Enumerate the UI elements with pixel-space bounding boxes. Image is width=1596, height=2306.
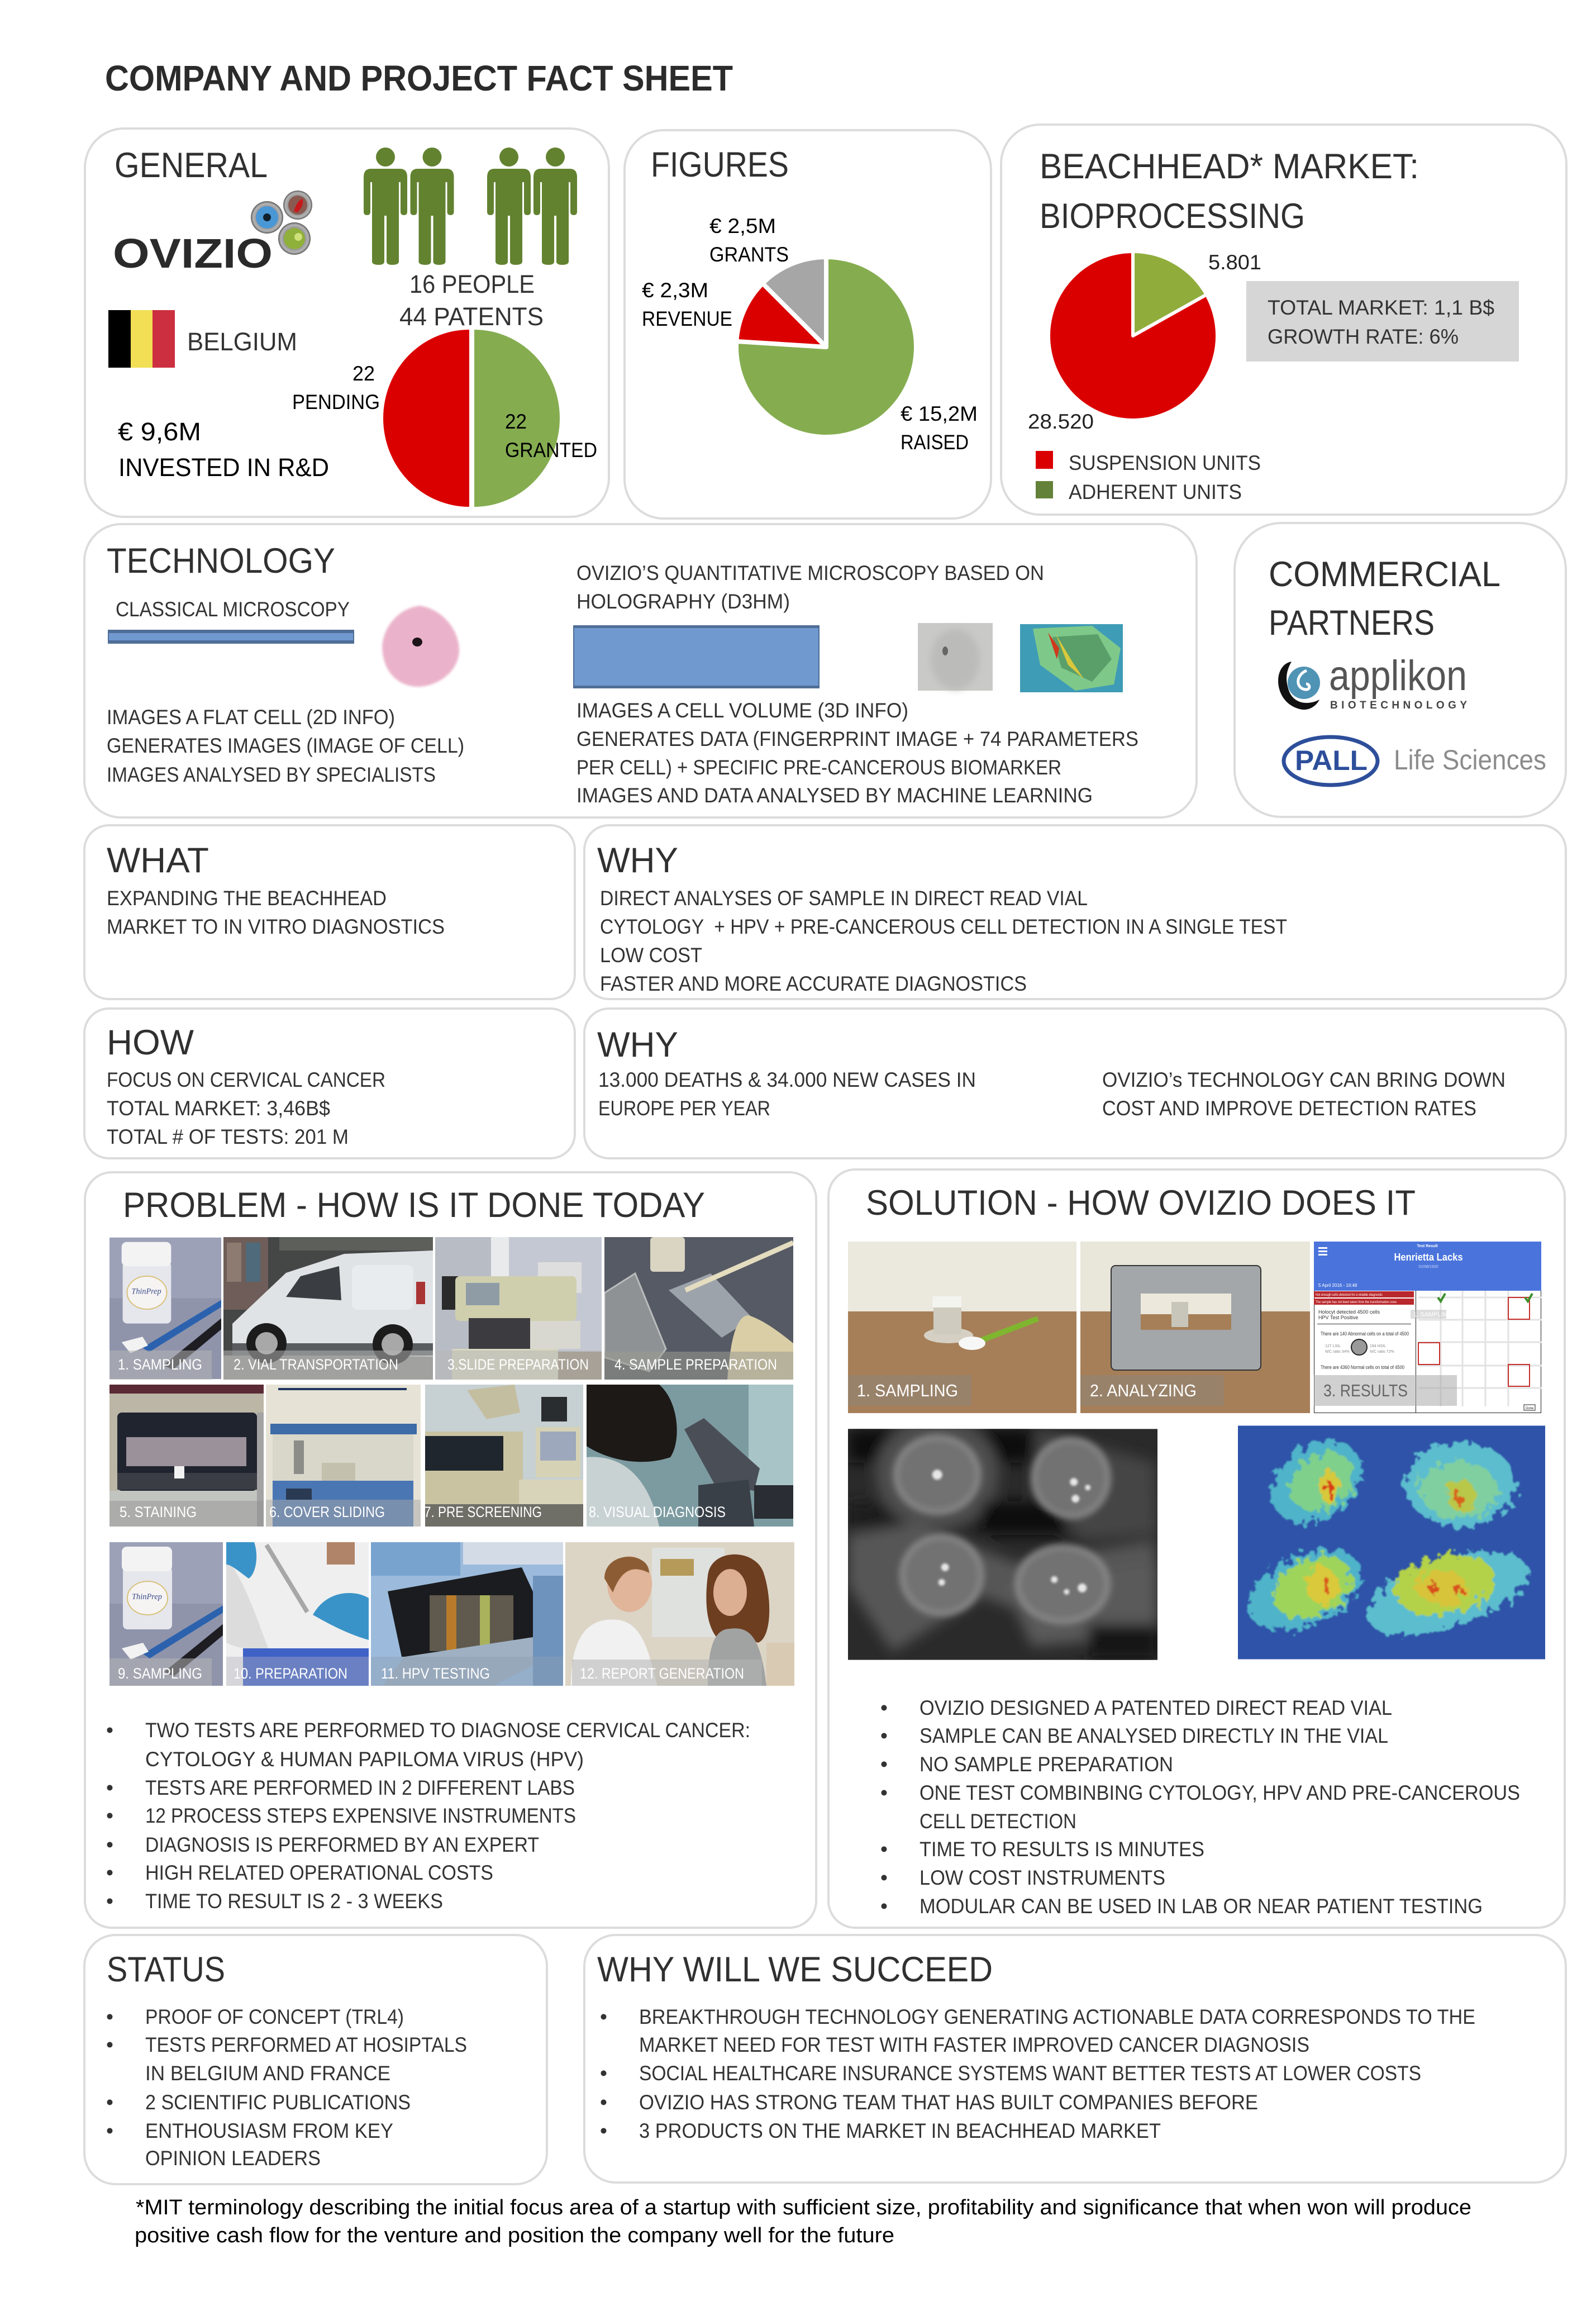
icon: people xyxy=(364,148,577,265)
legend xyxy=(1036,451,1261,503)
logo: applikon xyxy=(1278,652,1467,711)
panel frame: how xyxy=(84,1009,575,1158)
why benefits text: DIRECT ANALYSES OF SAMPLE IN DIRECT READ VIAL xyxy=(600,887,1088,910)
bullet list: success factors: • xyxy=(600,2119,607,2142)
incidence text xyxy=(598,1068,976,1120)
why benefits text: CYTOLOGY + HPV + PRE-CANCEROUS CELL DETECTION IN A SINGLE TEST xyxy=(600,915,1287,938)
photo: 11 hpv testing xyxy=(371,1542,563,1686)
panel frame: why will we succeed xyxy=(584,1935,1566,2183)
bullet list: problem: • xyxy=(106,1776,113,1799)
technology impact text: COST AND IMPROVE DETECTION RATES xyxy=(1102,1097,1476,1120)
bullet list: status: • xyxy=(106,2091,113,2114)
panel frame: status xyxy=(84,1935,547,2184)
panel: status xyxy=(84,1935,547,2184)
heading: commercial partners: COMMERCIAL xyxy=(1269,555,1500,594)
heading: why: WHY xyxy=(597,1025,678,1064)
photo: 1 sampling: 1. SAMPLING xyxy=(118,1356,202,1373)
classical microscopy text xyxy=(107,706,464,786)
photo: 3 results screen: N/C ratio 34% xyxy=(1325,1350,1350,1354)
bullet list: success factors: BREAKTHROUGH TECHNOLOGY GENERATING ACTIONABLE DATA CORRESPONDS TO THE xyxy=(639,2005,1475,2028)
photo: 3 results screen: HPV Test Positive xyxy=(1318,1315,1358,1320)
panel: general xyxy=(85,129,609,517)
label: granted patents: 22 xyxy=(505,410,527,433)
photo: 1 sampling xyxy=(848,1242,1076,1413)
photo: 3 results screen: Done xyxy=(1526,1407,1534,1410)
photo: 10 preparation: 10. PREPARATION xyxy=(234,1665,347,1682)
bullet list: problem: HIGH RELATED OPERATIONAL COSTS xyxy=(145,1861,493,1884)
classical microscopy text: GENERATES IMAGES (IMAGE OF CELL) xyxy=(107,734,464,757)
panel frame: what xyxy=(84,825,575,999)
photo: 12 report generation: 12. REPORT GENERATION xyxy=(580,1665,744,1682)
legend: SUSPENSION UNITS xyxy=(1069,451,1261,474)
footnote: *MIT terminology describing the initial focus area of a startup with sufficient size, profitability and significance that when won will produce xyxy=(136,2196,1471,2219)
what text: MARKET TO IN VITRO DIAGNOSTICS xyxy=(107,915,445,938)
photo: 1 sampling xyxy=(109,1238,222,1380)
icon: belgian flag xyxy=(108,310,175,368)
label: grants: € 2,5M xyxy=(709,215,776,237)
bullet list: solution: • xyxy=(880,1753,888,1776)
bullet list: solution: • xyxy=(880,1866,888,1889)
R&D investment figure: € 9,6M xyxy=(118,417,201,446)
heading: solution: SOLUTION - HOW OVIZIO DOES IT xyxy=(866,1183,1416,1223)
heading: what: WHAT xyxy=(107,841,209,880)
heading: why will we succeed: WHY WILL WE SUCCEED xyxy=(597,1950,993,1989)
label: quantitative microscopy: OVIZIO’S QUANTITATIVE MICROSCOPY BASED ON xyxy=(577,562,1044,584)
bullet list: solution: OVIZIO DESIGNED A PATENTED DIRECT READ VIAL xyxy=(920,1696,1392,1719)
image: stained cell xyxy=(382,606,459,687)
panel frame: technology xyxy=(84,524,1197,817)
heading: how: HOW xyxy=(107,1023,194,1062)
panel: beachhead market xyxy=(1001,125,1566,515)
classical microscopy text: IMAGES ANALYSED BY SPECIALISTS xyxy=(107,763,436,786)
legend: ADHERENT UNITS xyxy=(1069,481,1242,503)
label: quantitative microscopy: HOLOGRAPHY (D3HM) xyxy=(577,590,790,613)
bullet list: status: ENTHOUSIASM FROM KEY xyxy=(145,2119,393,2142)
panel: problem xyxy=(85,1172,816,1928)
technology impact text xyxy=(1102,1068,1506,1120)
photo: 7 pre screening xyxy=(424,1385,583,1527)
why benefits text xyxy=(600,887,1287,995)
photo: 11 hpv testing: 11. HPV TESTING xyxy=(381,1665,490,1682)
bullet list: problem: DIAGNOSIS IS PERFORMED BY AN EXPERT xyxy=(145,1833,539,1856)
footnote: positive cash flow for the venture and position the company well for the future xyxy=(135,2224,894,2247)
bullet list: solution: SAMPLE CAN BE ANALYSED DIRECTLY IN THE VIAL xyxy=(920,1724,1388,1747)
label: revenue: € 2,3M xyxy=(642,279,708,302)
quantitative microscopy text: GENERATES DATA (FINGERPRINT IMAGE + 74 PARAMETERS xyxy=(577,728,1138,750)
label: classical microscopy: CLASSICAL MICROSCOPY xyxy=(116,598,350,621)
label: pending patents: PENDING xyxy=(292,391,380,413)
photo: 3 results screen: Not enough cells detected for a reliable diagnostic xyxy=(1316,1294,1383,1297)
bullet list: problem: TESTS ARE PERFORMED IN 2 DIFFERENT LABS xyxy=(145,1776,575,1799)
photo: 3 slide preparation xyxy=(435,1237,602,1380)
heading: beachhead market xyxy=(1040,147,1419,236)
photo: 9 sampling xyxy=(109,1542,224,1686)
panel frame: why benefits xyxy=(584,825,1566,999)
panel: what xyxy=(84,825,575,999)
how text: TOTAL # OF TESTS: 201 M xyxy=(107,1125,349,1148)
incidence text: EUROPE PER YEAR xyxy=(598,1097,770,1120)
bullet list: solution: TIME TO RESULTS IS MINUTES xyxy=(920,1838,1204,1861)
pie chart: patents xyxy=(383,330,560,507)
bullet list: solution: LOW COST INSTRUMENTS xyxy=(920,1866,1165,1889)
photo: 10 preparation xyxy=(226,1542,369,1686)
bullet list: problem: • xyxy=(106,1833,113,1856)
photo: 3 results screen xyxy=(1314,1242,1541,1413)
photo: 2 vial transportation xyxy=(223,1237,433,1380)
photo: 7 pre screening: 7. PRE SCREENING xyxy=(424,1504,542,1520)
bullet list: success factors: • xyxy=(600,2005,607,2028)
bullet list: status: • xyxy=(106,2119,113,2142)
callout: total market: TOTAL MARKET: 1,1 B$ xyxy=(1268,296,1494,319)
bullet list: status xyxy=(106,2005,467,2170)
people and patents counts: 44 PATENTS xyxy=(399,302,544,331)
image: 3D colour cells xyxy=(1236,1423,1545,1660)
callout: total market xyxy=(1246,281,1519,362)
flat cell bar xyxy=(108,630,354,644)
label: quantitative microscopy xyxy=(577,562,1044,613)
panel: why (technology benefits) xyxy=(584,825,1566,999)
bullet list: problem: • xyxy=(106,1861,113,1884)
photo: 3 results screen: 1. SAMPLING xyxy=(1413,1311,1452,1318)
photo: 1 sampling: 1. SAMPLING xyxy=(857,1381,958,1400)
bullet list: success factors: 3 PRODUCTS ON THE MARKET IN BEACHHEAD MARKET xyxy=(639,2119,1161,2142)
photo: 3 results screen: 127 LSIL xyxy=(1325,1344,1341,1348)
why benefits text: LOW COST xyxy=(600,944,702,967)
panel: technology xyxy=(84,524,1197,817)
bullet list: success factors: MARKET NEED FOR TEST WITH FASTER IMPROVED CANCER DIAGNOSIS xyxy=(639,2033,1309,2056)
bullet list: solution: ONE TEST COMBINBING CYTOLOGY, HPV AND PRE-CANCEROUS xyxy=(920,1781,1520,1804)
bullet list: status: TESTS PERFORMED AT HOSIPTALS xyxy=(145,2033,467,2056)
photo: 4 sample preparation xyxy=(604,1237,793,1380)
photo: 8 visual diagnosis: 8. VISUAL DIAGNOSIS xyxy=(589,1504,726,1520)
photo: 3 results screen: There are 4360 Normal cells on total of 4500 xyxy=(1321,1364,1404,1370)
bullet list: problem: • xyxy=(106,1804,113,1827)
R&D investment figure xyxy=(118,417,329,482)
label: raised: € 15,2M xyxy=(901,402,978,425)
heading: figures: FIGURES xyxy=(651,145,789,184)
bullet list: problem: CYTOLOGY & HUMAN PAPILOMA VIRUS (HPV) xyxy=(145,1748,584,1771)
logo: pall life sciences: Life Sciences xyxy=(1394,744,1546,776)
heading: technology: TECHNOLOGY xyxy=(107,541,335,581)
panel frame: general xyxy=(85,129,609,517)
bullet list: success factors: OVIZIO HAS STRONG TEAM THAT HAS BUILT COMPANIES BEFORE xyxy=(639,2091,1258,2114)
pie chart: units xyxy=(1049,251,1217,420)
panel: figures xyxy=(625,130,991,519)
heading: beachhead market: BEACHHEAD* MARKET: xyxy=(1040,147,1419,186)
bullet list: problem: TWO TESTS ARE PERFORMED TO DIAGNOSE CERVICAL CANCER: xyxy=(145,1719,750,1742)
image: greyscale cells xyxy=(848,1418,1157,1660)
heading: commercial partners: PARTNERS xyxy=(1269,603,1435,643)
country label: BELGIUM xyxy=(187,327,297,356)
people and patents counts xyxy=(399,270,544,331)
bullet list: solution: • xyxy=(880,1724,888,1747)
logo: applikon: BIOTECHNOLOGY xyxy=(1330,700,1467,711)
label: adherent count: 5.801 xyxy=(1208,251,1261,274)
photo: 3 results screen: 5 April 2016 - 16:48 xyxy=(1318,1283,1357,1288)
how text xyxy=(107,1068,385,1148)
panel frame: beachhead xyxy=(1001,125,1566,515)
bullet list: status: 2 SCIENTIFIC PUBLICATIONS xyxy=(145,2091,411,2114)
bullet list: status: IN BELGIUM AND FRANCE xyxy=(145,2062,390,2085)
logo: ovizio: OVIZIO xyxy=(113,230,273,277)
bullet list: solution: • xyxy=(880,1781,888,1804)
panel frame: figures xyxy=(625,130,991,519)
photo: 8 visual diagnosis xyxy=(587,1385,793,1527)
technology impact text: OVIZIO’s TECHNOLOGY CAN BRING DOWN xyxy=(1102,1068,1506,1091)
bullet list: solution: • xyxy=(880,1696,888,1719)
heading: why: WHY xyxy=(597,841,678,880)
label: raised xyxy=(901,402,978,454)
bullet list: problem: 12 PROCESS STEPS EXPENSIVE INSTRUMENTS xyxy=(145,1804,576,1827)
bullet list: success factors: SOCIAL HEALTHCARE INSURANCE SYSTEMS WANT BETTER TESTS AT LOWER COSTS xyxy=(639,2062,1421,2085)
bullet list: status: • xyxy=(106,2033,113,2056)
people and patents counts: 16 PEOPLE xyxy=(409,270,535,298)
panel: commercial partners xyxy=(1235,523,1566,817)
bullet list: success factors: • xyxy=(600,2062,607,2085)
label: pending patents xyxy=(292,362,380,413)
photo: 3 results screen: There are 140 Abnormal cells on a total of 4500 xyxy=(1321,1331,1409,1337)
logo: pall life sciences: PALL xyxy=(1295,745,1368,776)
photo: 12 report generation xyxy=(565,1542,794,1686)
heading: beachhead market: BIOPROCESSING xyxy=(1040,197,1305,236)
quantitative microscopy text: PER CELL) + SPECIFIC PRE-CANCEROUS BIOMARKER xyxy=(577,756,1061,779)
label: granted patents: GRANTED xyxy=(505,439,597,462)
bullet list: solution: • xyxy=(880,1895,888,1918)
photo: 5 staining xyxy=(109,1385,264,1527)
logo: pall life sciences xyxy=(1284,737,1546,785)
panel frame: solution xyxy=(828,1169,1565,1928)
photo: 3 results screen: Holocyt detected 4500 cells xyxy=(1318,1309,1380,1315)
panel: why (market need) xyxy=(584,1009,1566,1158)
cell volume block xyxy=(573,625,820,688)
photo: 5 staining: 5. STAINING xyxy=(120,1504,197,1520)
bullet list: status: • xyxy=(106,2005,113,2028)
quantitative microscopy text: IMAGES A CELL VOLUME (3D INFO) xyxy=(577,699,908,722)
photo: 4 sample preparation: 4. SAMPLE PREPARATION xyxy=(614,1356,777,1373)
label: pending patents: 22 xyxy=(352,362,375,385)
label: grants: GRANTS xyxy=(709,243,789,266)
what text xyxy=(107,887,445,938)
how text: TOTAL MARKET: 3,46B$ xyxy=(107,1097,330,1120)
panel frame: why need xyxy=(584,1009,1566,1158)
logo: applikon: applikon xyxy=(1329,652,1467,700)
what text: EXPANDING THE BEACHHEAD xyxy=(107,887,387,910)
bullet list: solution: • xyxy=(880,1838,888,1861)
photo: 3 results screen: Test Result xyxy=(1417,1244,1438,1248)
bullet list: problem: • xyxy=(106,1719,113,1742)
heading: general: GENERAL xyxy=(115,146,268,185)
photo: 3 results screen: 194 HSIL xyxy=(1370,1344,1386,1348)
callout: total market: GROWTH RATE: 6% xyxy=(1268,325,1459,348)
label: suspension count: 28.520 xyxy=(1028,410,1094,433)
bullet list: success factors: • xyxy=(600,2091,607,2114)
panel: solution xyxy=(828,1169,1565,1928)
heading: status: STATUS xyxy=(107,1950,225,1989)
photo: 9 sampling: 9. SAMPLING xyxy=(118,1665,202,1682)
photo: 3 slide preparation: 3.SLIDE PREPARATION xyxy=(447,1356,589,1373)
photo: 3 results screen: N/C ratio 72% xyxy=(1370,1350,1394,1354)
why benefits text: FASTER AND MORE ACCURATE DIAGNOSTICS xyxy=(600,972,1027,995)
bullet list: success factors xyxy=(600,2005,1475,2142)
incidence text: 13.000 DEATHS & 34.000 NEW CASES IN xyxy=(598,1068,976,1091)
photo: 3 results screen: Henrietta Lacks xyxy=(1394,1252,1462,1263)
photo: 2 analyzing: 2. ANALYZING xyxy=(1090,1381,1197,1400)
bullet list: problem xyxy=(106,1719,750,1913)
quantitative microscopy text xyxy=(577,699,1138,807)
image: greyscale cell xyxy=(918,623,993,691)
heading: problem: PROBLEM - HOW IS IT DONE TODAY xyxy=(123,1186,705,1225)
label: raised: RAISED xyxy=(901,431,969,454)
bullet list: solution: MODULAR CAN BE USED IN LAB OR NEAR PATIENT TESTING xyxy=(920,1895,1483,1918)
photo: 2 vial transportation: 2. VIAL TRANSPORTATION xyxy=(234,1356,398,1373)
bullet list: solution: NO SAMPLE PREPARATION xyxy=(920,1753,1173,1776)
photo: 3 results screen: 3. RESULTS xyxy=(1323,1381,1408,1400)
heading: commercial partners xyxy=(1269,555,1500,643)
photo: 6 cover sliding: 6. COVER SLIDING xyxy=(269,1504,385,1520)
bullet list: status: PROOF OF CONCEPT (TRL4) xyxy=(145,2005,404,2028)
label: grants xyxy=(709,215,789,266)
bullet list: problem: TIME TO RESULT IS 2 - 3 WEEKS xyxy=(145,1890,443,1913)
how text: FOCUS ON CERVICAL CANCER xyxy=(107,1068,385,1091)
bullet list: solution: CELL DETECTION xyxy=(920,1810,1076,1833)
pie chart: funding xyxy=(736,257,916,437)
photo: 3 results screen: The sample has not been taken from the transformation zone xyxy=(1316,1301,1397,1304)
photo: 2 analyzing xyxy=(1080,1242,1310,1413)
label: revenue xyxy=(642,279,732,330)
panel: why will we succeed xyxy=(584,1935,1566,2183)
image: 3D cell map xyxy=(1020,624,1123,692)
photo: 3 results screen: 01/08/1920 xyxy=(1418,1265,1438,1269)
label: revenue: REVENUE xyxy=(642,307,732,330)
bullet list: problem: • xyxy=(106,1890,113,1913)
title: COMPANY AND PROJECT FACT SHEET xyxy=(105,58,733,98)
bullet list: solution xyxy=(880,1696,1520,1918)
label: granted patents xyxy=(505,410,597,462)
panel frame: commercial partners xyxy=(1235,523,1566,817)
panel frame: problem xyxy=(85,1172,816,1928)
footnote xyxy=(135,2196,1471,2247)
bullet list: status: OPINION LEADERS xyxy=(145,2147,321,2170)
logo: ovizio xyxy=(113,191,312,277)
quantitative microscopy text: IMAGES AND DATA ANALYSED BY MACHINE LEARNING xyxy=(577,784,1093,807)
panel: how xyxy=(84,1009,575,1158)
R&D investment figure: INVESTED IN R&D xyxy=(118,453,329,482)
classical microscopy text: IMAGES A FLAT CELL (2D INFO) xyxy=(107,706,395,729)
photo: 6 cover sliding xyxy=(266,1385,421,1527)
